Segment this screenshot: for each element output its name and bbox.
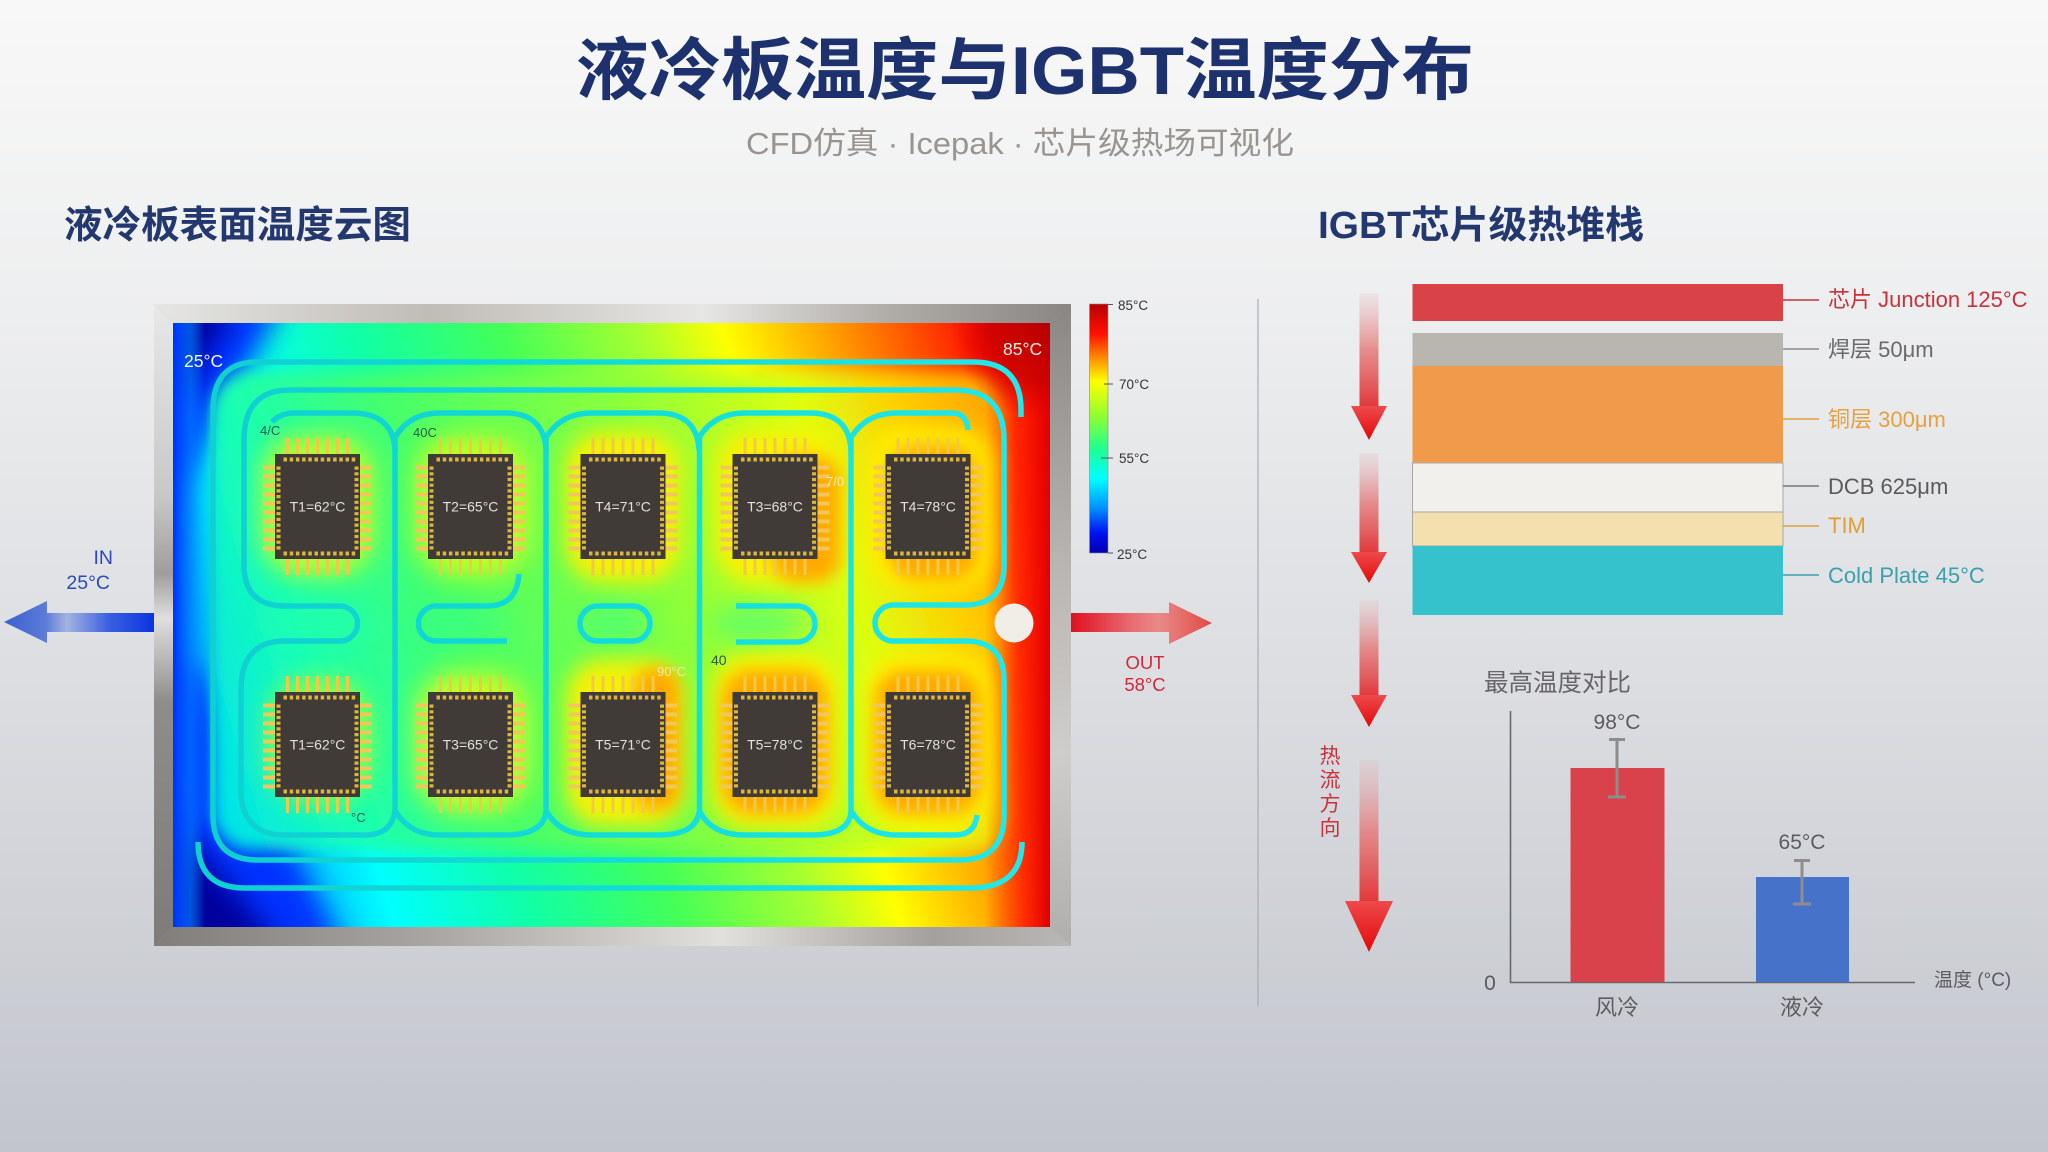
colour scale legend: 55°C [1119, 451, 1149, 466]
small field labels: 7/0 [826, 474, 844, 489]
arrow: heat flow 3 [1351, 600, 1387, 727]
chart: thermal stack layers: 芯片 Junction 125°C [1828, 287, 2028, 312]
chip T5 row 2: T5=71°C [595, 736, 651, 752]
chip T4 row 1 right: T4=78°C [900, 498, 956, 514]
chip T4 row 1 right [880, 446, 976, 567]
chip T5 row 2 second [726, 684, 824, 805]
chip T3 row 2 [422, 684, 519, 805]
small field labels: 4/C [260, 423, 280, 438]
colour scale legend: 70°C [1119, 377, 1149, 392]
chip hot spots [262, 436, 528, 812]
title: 液冷板温度与IGBT温度分布 [576, 33, 1474, 109]
chip T6 row 2 [880, 684, 976, 805]
chip T2 row 1 [422, 446, 519, 567]
chip T3 row 1: T3=68°C [747, 498, 803, 514]
arrow: heat flow 2 [1351, 453, 1387, 583]
colour scale legend [1090, 298, 1149, 562]
chip T1 row 1: T1=62°C [290, 498, 345, 514]
heading: left panel: 液冷板表面温度云图 [64, 205, 411, 247]
metal frame [154, 304, 1071, 946]
arrow: heat flow 4 [1345, 760, 1393, 952]
small field labels: °C [351, 810, 366, 825]
chip T1 row 2 [269, 684, 366, 805]
chart: thermal stack layers [1412, 284, 2028, 615]
colour scale legend: 25°C [1117, 547, 1147, 562]
small field labels [260, 423, 844, 825]
label: heat flow direction: 方 [1320, 793, 1340, 816]
chip T3 row 2: T3=65°C [443, 736, 498, 752]
label: inlet [66, 547, 113, 594]
bar: air cooling: 风冷 [1595, 995, 1639, 1020]
chip T4 row 1: T4=71°C [595, 498, 651, 514]
bar: liquid cooling: 液冷 [1780, 995, 1824, 1020]
label: outlet: 58°C [1124, 674, 1166, 695]
chart: max temperature comparison: 温度 (°C) [1934, 969, 2011, 991]
label: heat flow direction: 向 [1320, 817, 1340, 840]
chip T4 row 1 [574, 446, 672, 567]
chip T5 row 2 [574, 684, 672, 805]
chart: thermal stack layers: TIM [1828, 513, 1866, 538]
label: outlet [1124, 652, 1166, 695]
axes [1510, 711, 1915, 982]
chart: thermal stack layers: Cold Plate 45°C [1828, 563, 1985, 588]
label: heat flow direction: 热 [1320, 745, 1340, 768]
heading: right panel: IGBT芯片级热堆栈 [1318, 205, 1644, 247]
label: heat flow direction: 流 [1320, 769, 1340, 792]
corner label 25°C: 25°C [184, 351, 223, 371]
corner label 85°C: 85°C [1003, 339, 1042, 359]
bar: liquid cooling [1756, 831, 1849, 1020]
colour scale legend: 85°C [1118, 298, 1148, 313]
outlet port [994, 604, 1034, 642]
small field labels: 40C [413, 425, 437, 440]
chart: thermal stack layers: 铜层 300μm [1828, 407, 1946, 432]
axis labels: 0 [1484, 972, 1496, 995]
label: outlet: OUT [1125, 652, 1165, 673]
chip T6 row 2: T6=78°C [900, 736, 956, 752]
chip T5 row 2 second: T5=78°C [747, 736, 803, 752]
small field labels: 40 [711, 652, 727, 668]
bar: air cooling [1570, 711, 1664, 1020]
label: inlet: IN [94, 547, 113, 569]
subtitle: CFD仿真 · Icepak · 芯片级热场可视化 [746, 126, 1294, 161]
panel: cold plate with temperature contour [150, 300, 1071, 950]
chip T1 row 2: T1=62°C [290, 736, 345, 752]
chip T3 row 1 [726, 446, 824, 567]
chip T1 row 1 [269, 446, 366, 567]
chart: thermal stack layers: 焊层 50μm [1828, 337, 1934, 362]
blue corners [176, 323, 358, 927]
divider [1257, 299, 1259, 1006]
bar: liquid cooling: 65°C [1779, 831, 1825, 854]
cooling channels [198, 362, 1022, 888]
arrow: heat flow 1 [1351, 293, 1387, 440]
small field labels: 90°C [657, 664, 686, 679]
chart: thermal stack layers: DCB 625μm [1828, 474, 1948, 499]
label: heat flow direction [1320, 745, 1340, 840]
temperature field [150, 300, 1050, 950]
cool halos along channels [260, 605, 810, 641]
arrow: inlet [4, 601, 154, 643]
chip T2 row 1: T2=65°C [443, 498, 498, 514]
bar: air cooling: 98°C [1594, 711, 1640, 734]
chart title: 最高温度对比 [1484, 669, 1631, 697]
label: inlet: 25°C [66, 572, 110, 594]
arrow: outlet [1071, 602, 1212, 644]
chart: max temperature comparison [1484, 669, 2011, 1020]
